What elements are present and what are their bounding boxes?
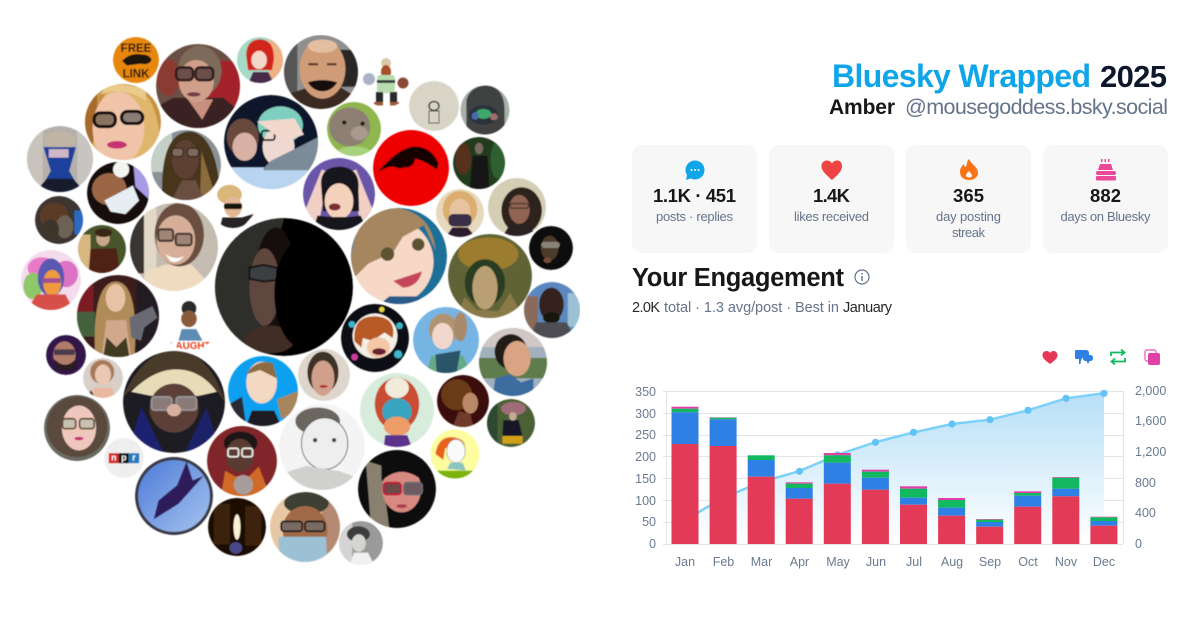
engagement summary: total · 1.3 avg/post · Best in [664,300,839,316]
cumulative area [685,393,1104,544]
month labels [675,555,1115,569]
avatar: cartoon man on blue [228,356,298,426]
engagement summary: January [843,300,893,316]
panel: stat posts [632,145,757,253]
avatar: blonde woman [85,84,161,165]
avatar: robot character sprite [363,58,408,106]
panel: stat streak: day posting [936,209,1001,224]
icon: likes legend [1042,351,1058,364]
avatar: red glasses woman [358,450,436,528]
chart: monthly engagement [635,384,1166,569]
right axis labels: 400 [1135,506,1156,520]
panel: stat streak: 365 [953,185,984,206]
panel: stat posts: posts · replies [656,209,734,224]
avatar: bearded man [524,282,580,338]
avatar: pale woman [83,358,123,398]
left axis labels: 250 [635,428,656,442]
panel: stat days: 882 [1090,185,1121,206]
avatar: candle in the dark [208,498,266,556]
avatar: free link: FREE [121,43,152,55]
panel: stat streak: streak [952,225,986,240]
avatar: large anime face [351,208,447,304]
avatar: smiling selfie [130,203,218,291]
avatar: masked hero girl [360,373,434,447]
right axis labels: 0 [1135,537,1142,551]
icon: speech bubble [686,160,704,180]
month labels: Jun [866,555,886,569]
user name and handle: Amber [829,96,895,119]
avatar: purple hair pull cartoon [303,158,375,230]
avatar: rainbow portrait [21,250,81,310]
avatar: brown hair profile [437,375,489,427]
avatar: blonde with mask [436,189,484,237]
chart grid [663,391,1124,544]
panel: stat likes: 1.4K [813,185,851,206]
avatar: masked cartoon [87,161,149,224]
avatar: woman plain wall [298,349,350,401]
stacked bars [672,407,1117,544]
right axis labels: 1,200 [1135,445,1166,459]
avatar: purple dragon [135,457,213,535]
avatar: orange hair pattern [341,304,409,372]
avatar: pencil sketch woman [279,404,365,490]
avatar: bald man [284,35,358,109]
icon: info [855,270,869,284]
right axis labels [1135,384,1166,551]
panel: stat days: days on Bluesky [1060,209,1151,224]
avatar: shaggy pet [35,196,83,244]
avatar: npr logo: r [132,452,136,462]
avatar: garden portrait [453,137,505,189]
avatar: npr logo [104,438,144,478]
icon: reposts legend [1111,350,1125,364]
title: Bluesky Wrapped [832,58,1091,94]
avatar: woman with glasses [156,44,240,128]
month labels: Apr [790,555,809,569]
avatar: teal haired pair [224,95,318,191]
month labels: Nov [1055,555,1078,569]
avatar: mask and glasses [270,492,340,562]
panel: stat posts: 1.1K · 451 [653,185,736,206]
user name and handle: @mousegoddess.bsky.social [905,95,1168,119]
icon: flame [960,159,978,180]
avatar: black and white portrait [339,521,383,565]
heading: your engagement: Your Engagement [632,264,844,292]
avatar: red eye [373,130,449,206]
avatar: blond sunglasses [217,185,254,228]
avatar: dark lace mask [529,226,573,270]
month labels: May [826,555,851,569]
month labels: Feb [713,555,734,569]
avatar: laughter cartoon [170,300,210,350]
avatar: bearded glasses [46,335,86,375]
right axis labels: 2,000 [1135,384,1166,398]
month labels: Jul [906,555,922,569]
right axis labels: 1,600 [1135,414,1166,428]
avatar: pencil doodle [409,81,459,131]
panel: stat likes: likes received [794,209,869,224]
avatar: laughter cartoon: 'LAUGHT' [167,341,213,352]
avatar: free link [113,37,159,83]
avatar: curly hair woman [488,178,546,236]
month labels: Dec [1093,555,1115,569]
left axis labels: 300 [635,407,656,421]
month labels: Jan [675,555,695,569]
title: 2025 [1100,59,1167,94]
avatar: free link: LINK [123,68,150,80]
month labels: Sep [979,555,1001,569]
chart legend [1042,350,1160,365]
avatar: garden woman back [487,399,535,447]
month labels: Aug [941,555,963,569]
avatar: npr logo: p [121,452,127,462]
avatar: blond hood man [123,351,225,453]
avatar: corset [27,126,93,192]
panel: stat days [1043,145,1168,253]
right axis labels: 800 [1135,476,1156,490]
left axis labels: 50 [642,515,656,529]
avatar: woman with pistol [77,275,159,357]
month labels: Mar [751,555,772,569]
avatar: afro and silver glasses [207,426,277,496]
avatar: blue anime girl [413,307,479,373]
avatar: painted green portrait [448,234,532,318]
left axis labels: 100 [635,494,656,508]
month labels: Oct [1018,555,1038,569]
left axis labels: 150 [635,472,656,486]
left axis labels [635,385,656,551]
avatar: curly glasses woman [44,395,110,461]
left axis labels: 350 [635,385,656,399]
avatar: wombat [327,102,381,157]
icon: quotes legend [1145,350,1160,365]
avatar: medieval portrait [78,225,126,273]
avatar: yellow cartoon [430,430,480,478]
left axis labels: 200 [635,450,656,464]
panel: stat streak [906,145,1031,253]
avatar: hooded chrome helmet [460,86,510,134]
icon: heart [822,160,842,180]
engagement summary: 2.0K [632,300,660,316]
avatar: npr logo: n [111,452,116,462]
avatar cluster [21,35,580,565]
panel: stat likes [769,145,894,253]
engagement summary [632,300,893,316]
icon: cake [1096,159,1116,180]
avatar: red haired anime [237,37,283,83]
left axis labels: 0 [649,537,656,551]
icon: replies legend [1075,350,1093,364]
avatar: woman in denim [479,328,547,396]
avatar: dreadlocks woman [151,130,221,200]
cumulative line [685,390,1108,520]
avatar: main dark portrait [215,218,353,356]
